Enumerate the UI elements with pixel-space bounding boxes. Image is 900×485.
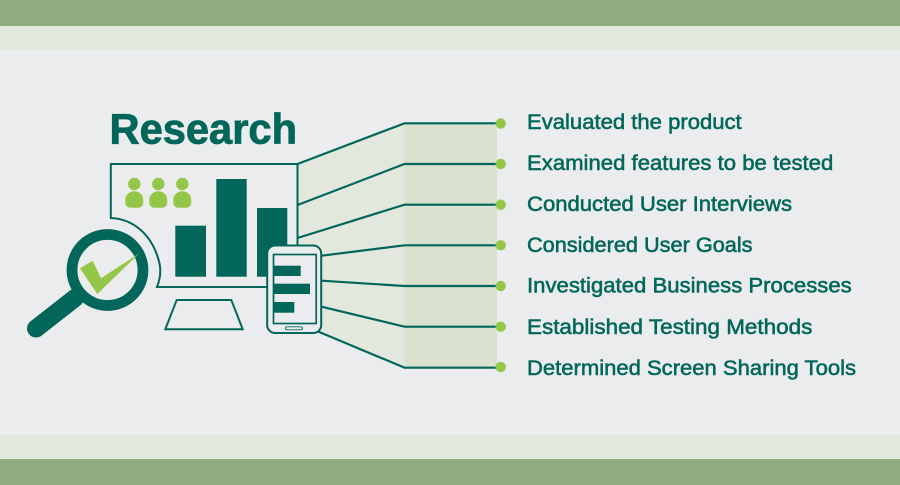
icon: tablet	[267, 246, 321, 333]
connector lines	[298, 123, 497, 368]
item 7: Determined Screen Sharing Tools	[527, 356, 856, 380]
bar chart	[175, 179, 287, 277]
item 5: Investigated Business Processes	[527, 274, 852, 298]
connector dots	[496, 118, 506, 372]
title: Research	[110, 106, 297, 154]
monitor stand	[165, 300, 243, 329]
icon: magnifying glass with check mark	[36, 234, 143, 328]
item 6: Established Testing Methods	[527, 315, 812, 339]
item 4: Considered User Goals	[527, 233, 752, 257]
top band	[0, 0, 900, 50]
check mark	[80, 253, 139, 294]
item 1: Evaluated the product	[527, 110, 742, 134]
icon: people	[125, 178, 191, 208]
monitor outline	[111, 164, 298, 287]
list of research activities	[527, 110, 856, 380]
item 3: Conducted User Interviews	[527, 192, 792, 216]
item 2: Examined features to be tested	[527, 151, 833, 175]
connector panel	[298, 123, 497, 368]
bottom band	[0, 434, 900, 485]
